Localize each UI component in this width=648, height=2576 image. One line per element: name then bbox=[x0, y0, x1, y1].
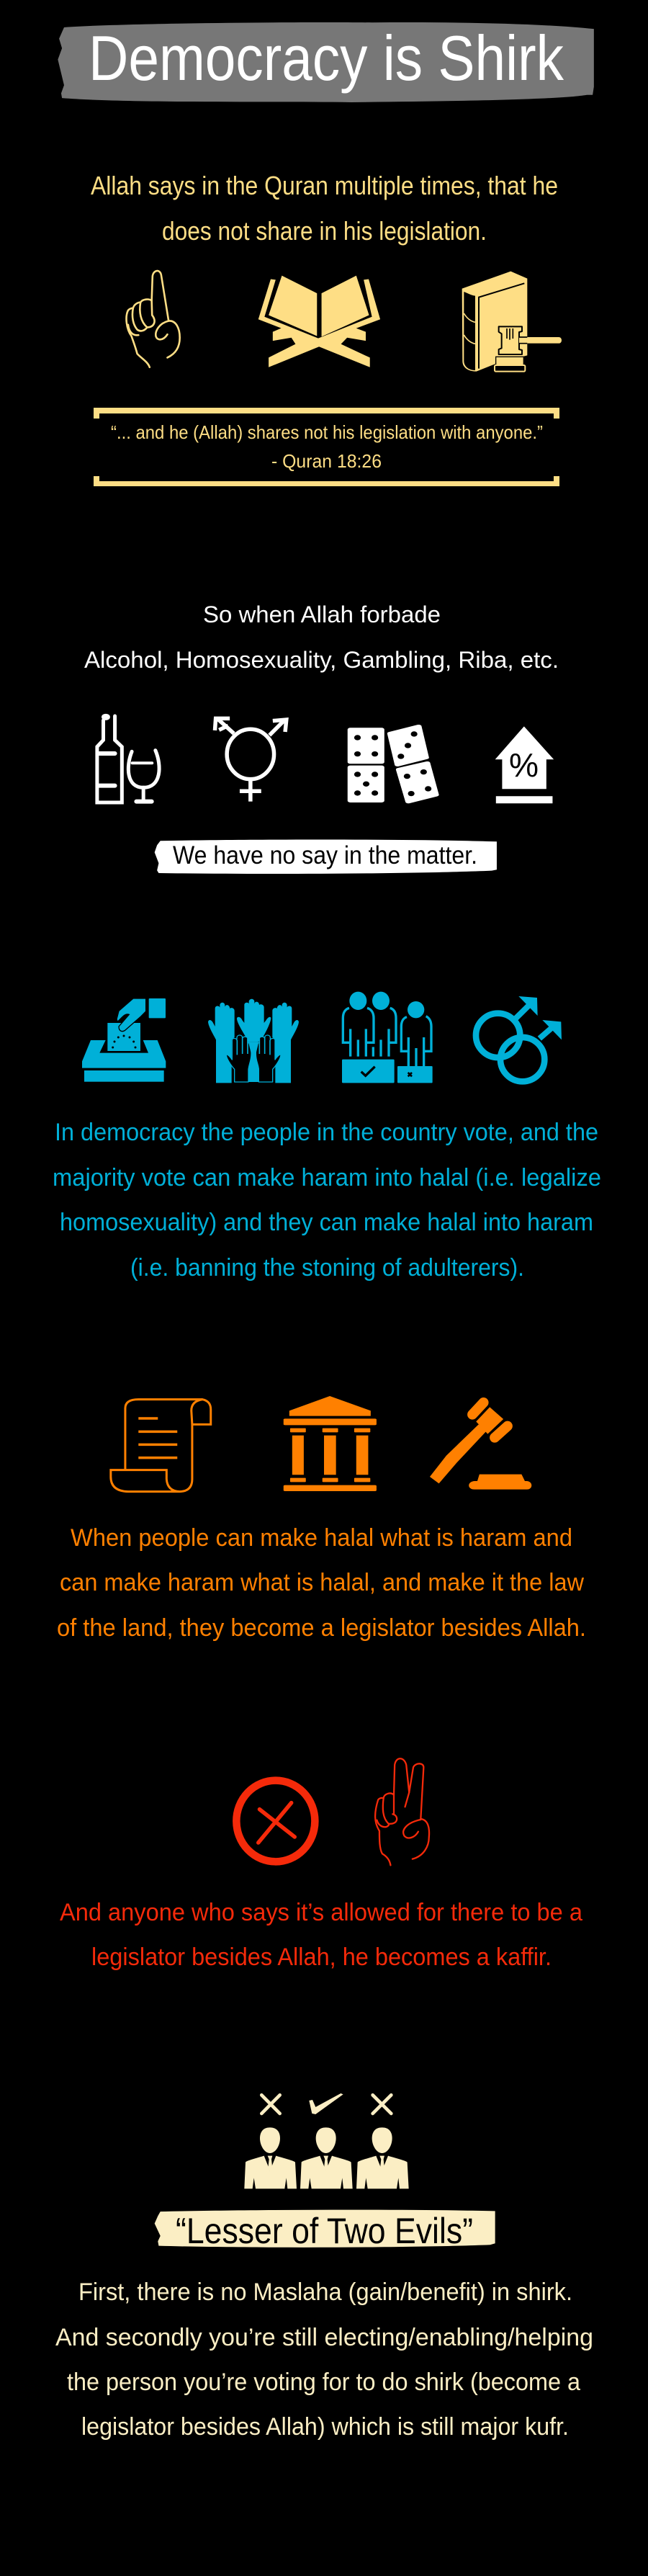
title banner: Democracy is Shirk bbox=[89, 22, 564, 94]
section: forbidden things bbox=[84, 601, 559, 874]
section: kaffir bbox=[60, 1758, 582, 1971]
quote brackets bbox=[94, 408, 559, 486]
lesser of two evils text: First, there is no Maslaha (gain/benefit) in shirk. bbox=[78, 2278, 572, 2306]
kaffir text bbox=[60, 1899, 582, 1971]
democracy text bbox=[53, 1119, 601, 1282]
icon: male symbols bbox=[476, 996, 562, 1081]
section: legislator bbox=[57, 1396, 586, 1642]
icon: candidates bbox=[244, 2093, 409, 2188]
icon: law book with gavel bbox=[462, 272, 562, 372]
lesser of two evils text: And secondly you’re still electing/enabling/helping bbox=[55, 2324, 593, 2351]
forbade text bbox=[84, 601, 559, 673]
icon: crossed circle bbox=[236, 1781, 315, 1861]
forbade text: So when Allah forbade bbox=[203, 601, 441, 627]
quran quote bbox=[111, 421, 543, 472]
lesser of two evils text: the person you’re voting for to do shirk (become a bbox=[67, 2369, 580, 2396]
forbade text: Alcohol, Homosexuality, Gambling, Riba, etc. bbox=[84, 647, 559, 673]
section: Allah does not share in legislation bbox=[91, 171, 562, 486]
icon: pointing finger bbox=[127, 271, 180, 367]
legislator text: of the land, they become a legislator besides Allah. bbox=[57, 1614, 586, 1642]
icon: riba percent arrow bbox=[495, 726, 554, 803]
icon: government building bbox=[284, 1396, 377, 1491]
icon: riba percent arrow: % bbox=[509, 746, 539, 784]
icon: people voting bbox=[342, 992, 433, 1083]
icon: scroll bbox=[111, 1400, 211, 1492]
icon: open Quran on stand bbox=[258, 276, 380, 367]
icon: raised hands bbox=[208, 999, 299, 1083]
intro text: Allah says in the Quran multiple times, that he bbox=[91, 171, 558, 200]
section: lesser of two evils bbox=[55, 2093, 593, 2441]
kaffir text: legislator besides Allah, he becomes a kaffir. bbox=[91, 1944, 552, 1971]
quran quote: “... and he (Allah) shares not his legislation with anyone.” bbox=[111, 421, 543, 443]
icon: two fingers bbox=[375, 1758, 429, 1865]
icon: dice bbox=[351, 726, 436, 802]
intro text bbox=[91, 171, 558, 246]
lesser of two evils text bbox=[55, 2278, 593, 2441]
legislator text: When people can make halal what is haram and bbox=[71, 1524, 572, 1552]
banner: no say: We have no say in the matter. bbox=[173, 841, 477, 869]
legislator text: can make haram what is halal, and make it the law bbox=[60, 1569, 584, 1596]
democracy text: In democracy the people in the country vote, and the bbox=[55, 1119, 598, 1146]
icon: bottle and glass bbox=[97, 715, 159, 802]
democracy text: (i.e. banning the stoning of adulterers). bbox=[130, 1254, 524, 1282]
democracy text: majority vote can make haram into halal (i.e. legalize bbox=[53, 1164, 601, 1191]
icon: ballot box bbox=[82, 998, 166, 1082]
icon: gavel bbox=[430, 1403, 531, 1490]
kaffir text: And anyone who says it’s allowed for there to be a bbox=[60, 1899, 582, 1926]
intro text: does not share in his legislation. bbox=[162, 216, 487, 246]
quran quote: - Quran 18:26 bbox=[271, 450, 382, 472]
banner: lesser of two evils: “Lesser of Two Evils” bbox=[176, 2211, 473, 2251]
democracy text: homosexuality) and they can make halal into haram bbox=[60, 1209, 593, 1236]
legislator text bbox=[57, 1524, 586, 1642]
section: democracy voting bbox=[53, 992, 601, 1282]
icon: transgender symbol bbox=[215, 718, 287, 802]
lesser of two evils text: legislator besides Allah) which is still major kufr. bbox=[81, 2413, 569, 2441]
